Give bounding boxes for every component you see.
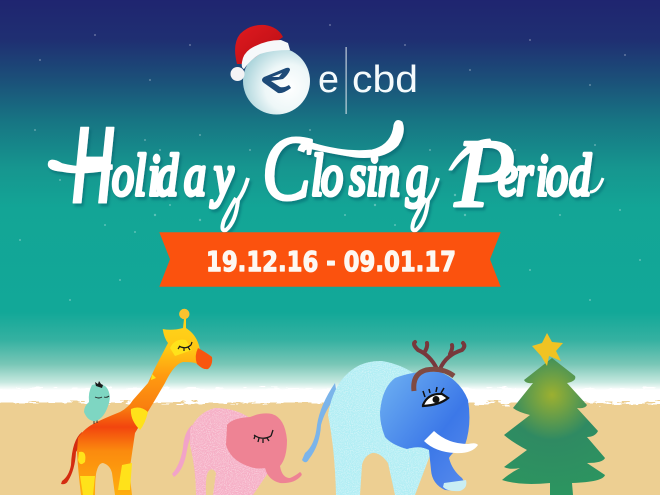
sand [0, 400, 660, 495]
title: C [262, 118, 312, 220]
tusk [424, 431, 478, 453]
santa hat [230, 25, 290, 81]
bird eyes [95, 396, 109, 398]
blue elephant body [328, 361, 432, 495]
pink elephant [172, 408, 302, 495]
giraffe eye [178, 342, 192, 351]
blue elephant eye [423, 387, 448, 406]
headband [414, 369, 454, 391]
logo wordmark: cbd [352, 59, 418, 101]
bird legs [94, 420, 97, 424]
pink elephant head and trunk [226, 413, 302, 483]
surf foam [0, 389, 660, 403]
reindeer antlers [414, 342, 464, 369]
title: eriod [498, 143, 592, 209]
giraffe tail [61, 432, 84, 484]
giraffe [61, 309, 212, 495]
blue elephant trunk tip [443, 480, 466, 491]
pink elephant body [190, 408, 270, 495]
bird hair [95, 381, 103, 388]
logo wordmark: e [318, 59, 339, 101]
tree shape [502, 358, 605, 495]
blue elephant [302, 342, 478, 495]
snow speckles [19, 24, 641, 301]
title: P [454, 120, 515, 228]
dates: 19.12.16 - 09.01.17 [206, 245, 456, 278]
pink elephant eye [254, 430, 273, 443]
title: losing [311, 143, 428, 209]
logo wordmark [318, 47, 418, 114]
ribbon shape [159, 232, 501, 287]
bird body [84, 384, 110, 421]
pink elephant tail [172, 425, 194, 477]
giraffe body [77, 319, 212, 495]
blue elephant head and trunk [380, 372, 469, 490]
tree star [532, 333, 563, 366]
date ribbon [159, 232, 501, 287]
logo ball [243, 48, 310, 114]
giraffe nose [196, 348, 212, 369]
giraffe horn [179, 309, 190, 319]
blue elephant tail [302, 383, 337, 462]
title: oliday [112, 143, 234, 209]
title: H [72, 105, 114, 227]
title [49, 105, 603, 230]
giraffe yellow spots [78, 340, 192, 495]
bird [84, 381, 110, 424]
christmas tree [502, 333, 605, 495]
logo [230, 25, 418, 115]
logo e mark [262, 68, 291, 93]
